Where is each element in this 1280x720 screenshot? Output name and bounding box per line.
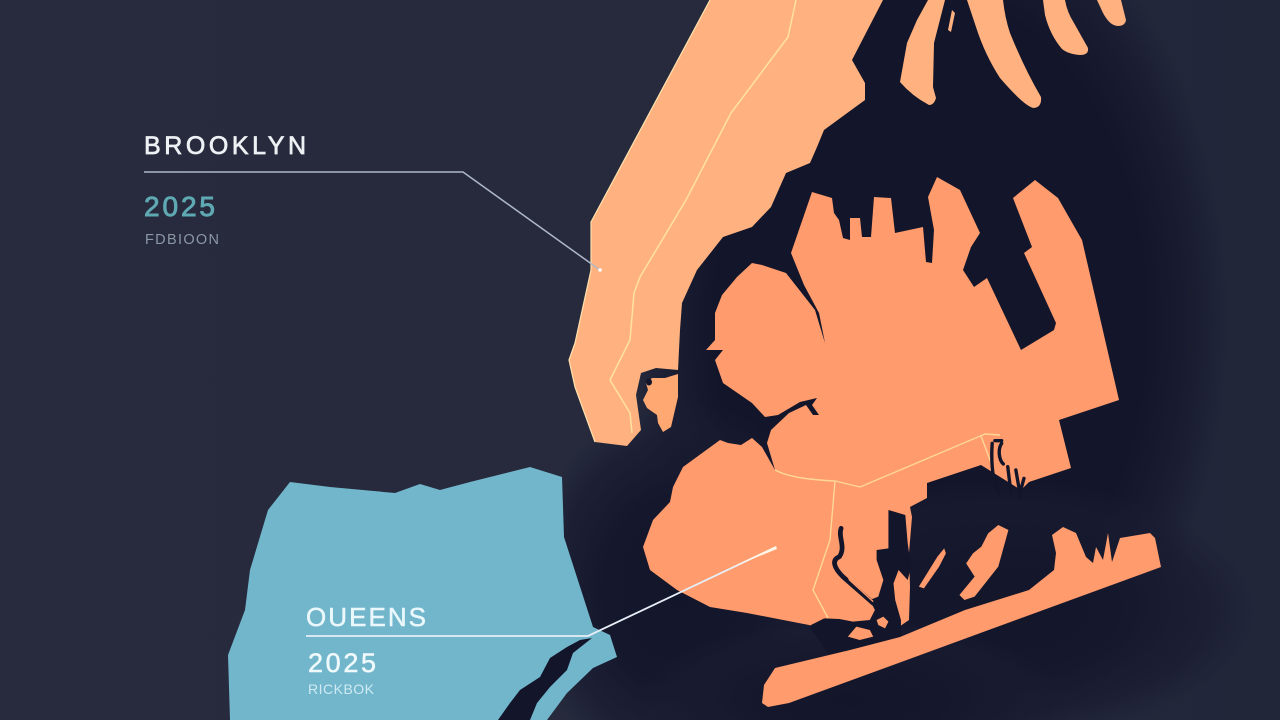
caption: FDBIOON (145, 232, 219, 248)
marsh islets (848, 617, 888, 640)
bay and marsh channels (809, 510, 911, 655)
region: northern fingers (900, 0, 1126, 108)
callout heading: BROOKLYN (144, 132, 306, 160)
region: Queens blue landmass (228, 467, 617, 720)
leader tip (730, 546, 777, 568)
leader end point (598, 268, 602, 272)
water channel in blue landmass (498, 638, 592, 720)
callout heading: OUEENS (306, 602, 426, 632)
island hole (646, 378, 652, 386)
callout: Queens (306, 546, 777, 697)
region: Brooklyn peninsula (569, 0, 883, 446)
leader line (144, 172, 600, 270)
gulf islands (919, 525, 1008, 600)
boundary lines between neighbourhoods (775, 434, 1000, 618)
caption: RICKBOK (308, 681, 375, 697)
inner boundary line (610, 0, 796, 433)
region: main orange landmass (643, 177, 1119, 655)
leader line (306, 547, 776, 636)
year: 2025 (144, 191, 215, 222)
region: barrier beach (762, 527, 1161, 707)
narrow stripes of water (992, 441, 1024, 497)
callout: Brooklyn (144, 132, 602, 272)
year: 2025 (308, 648, 376, 678)
small island (643, 374, 678, 432)
map of boroughs (228, 0, 1161, 720)
outer coastline highlight (569, 0, 710, 442)
water shadow around the map (525, 0, 1260, 720)
